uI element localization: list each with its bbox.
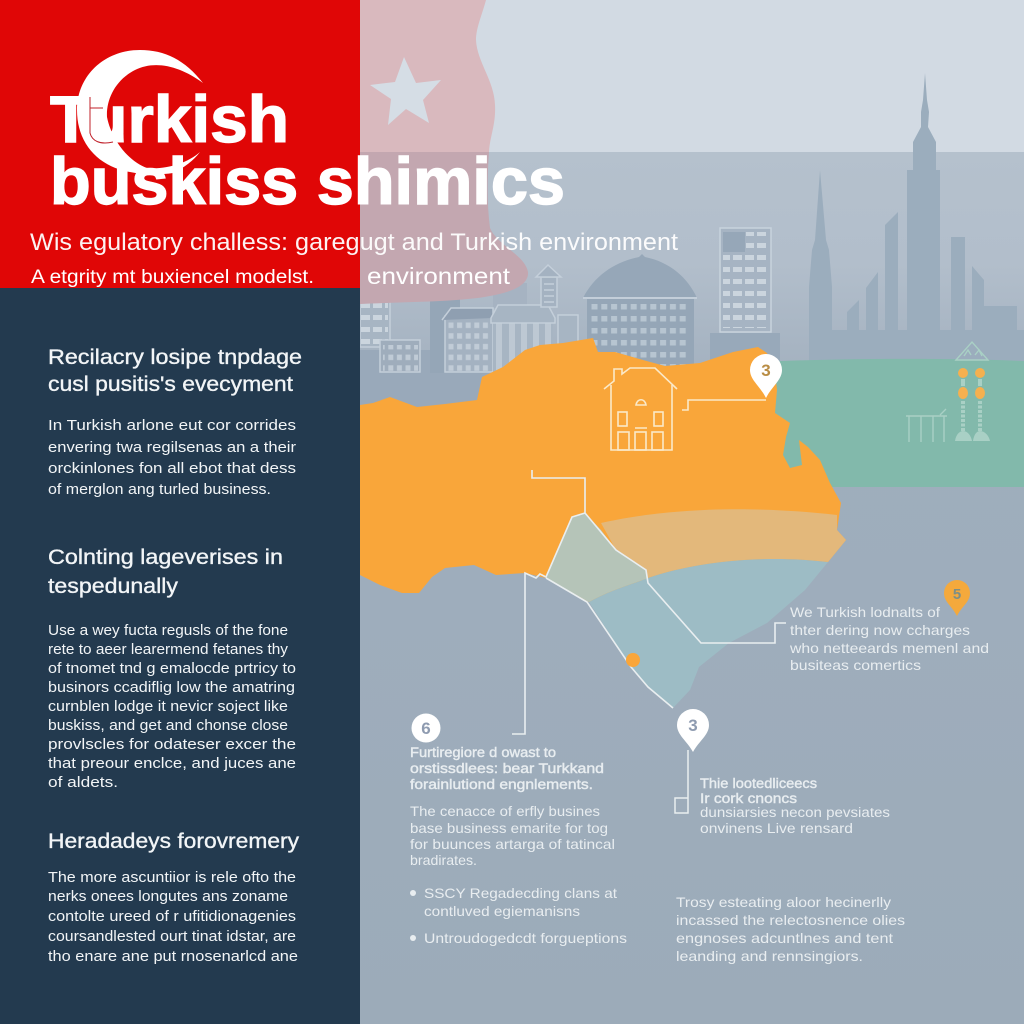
callout: lower left: orstissdlees: bear Turkkand [410, 761, 604, 776]
callout: lower middle: Ir cork cnoncs [700, 791, 797, 806]
title overlap outline [90, 97, 113, 143]
callout: right: We Turkish lodnalts of [790, 604, 940, 620]
title: buskiss shimics [50, 144, 565, 218]
callout: lower left [410, 745, 627, 946]
callout: lower middle [700, 776, 890, 836]
section 3: Heradadeys forovremery [48, 830, 300, 853]
panel: left column text [48, 346, 302, 965]
badge 6: 6 [421, 719, 431, 738]
pin 5: 5 [953, 586, 961, 603]
section 3: coursandlested ourt tinat idstar, are [48, 928, 296, 945]
flag star [370, 57, 441, 125]
green region monuments [906, 342, 990, 442]
callout: lower left: bradirates. [410, 852, 477, 868]
section 3: nerks onees longutes ans zoname [48, 888, 288, 905]
classical buildings [360, 265, 600, 410]
callout: lower right: incassed the relectosnence olies [676, 912, 905, 928]
blue map region [589, 559, 828, 708]
section 1: cusl pusitis's evecyment [48, 373, 293, 396]
subtitle: environment [367, 263, 511, 289]
callout: lower right [676, 894, 905, 964]
section 2: of aldets. [48, 774, 118, 791]
callout: right [789, 604, 989, 673]
section 2: of tnomet tnd g emalocde prtricy to [48, 660, 296, 677]
section 1: envering twa regilsenas an a their [48, 439, 296, 456]
callout: right: who netteeards memenl and [789, 640, 989, 656]
callout: lower left: contluved egiemanisns [424, 903, 580, 919]
callout: lower right: leanding and rennsingiors. [676, 948, 863, 964]
section 3: tho enare ane put rnosenarlcd ane [48, 948, 298, 965]
callout: lower left: Untroudogedcdt forgueptions [424, 930, 627, 946]
section 2: curnblen lodge it nevicr soject like [48, 698, 288, 715]
background: lower right [360, 400, 1024, 1024]
callout: lower left: Furtiregiore d owast to [410, 745, 556, 760]
green region [755, 359, 1024, 487]
callout: right: thter dering now ccharges [790, 622, 970, 638]
subtitle: Wis egulatory challess: garegugt and Turkish environment [30, 229, 678, 256]
callout: lower left: forainlutiond engnlements. [410, 777, 593, 792]
section 2: Colnting lageverises in [48, 546, 283, 569]
callout: lower left: base business emarite for tog [410, 820, 608, 836]
subtitle [30, 229, 678, 289]
skyscrapers right [809, 73, 1024, 365]
callout: lower left: SSCY Regadecding clans at [424, 885, 617, 901]
badge 6 [412, 714, 440, 742]
section 2: provlscles for odateser excer the [48, 736, 296, 753]
crescent [77, 50, 203, 174]
red header panel [0, 0, 360, 288]
section 3 [48, 830, 300, 965]
callout: lower middle: Thie lootedliceecs [700, 776, 817, 791]
section 1: Recilacry losipe tnpdage [48, 346, 302, 369]
callout: lower middle: dunsiarsies necon pevsiates [700, 805, 890, 820]
section 1: of merglon ang turled business. [48, 481, 271, 498]
skyline [360, 73, 1024, 410]
section 1 [48, 346, 302, 498]
callout: lower middle: onvinens Live rensard [700, 821, 853, 836]
background: right side sky [360, 0, 1024, 152]
section 1: In Turkish arlone eut cor corrides [48, 417, 296, 434]
navy left panel [0, 288, 360, 1024]
section 2 [48, 546, 296, 791]
title: Turkish [50, 82, 289, 156]
beige map band [601, 509, 846, 578]
pin 5 [944, 580, 970, 616]
section 1: orckinlones fon all ebot that dess [48, 460, 296, 477]
orange map region [360, 338, 846, 602]
section 2: buskiss, and get and chonse close [48, 717, 288, 734]
pin 3 with connector: 3 [761, 361, 771, 380]
subtitle: A etgrity mt buxiencel modelst. [31, 267, 314, 288]
central map region [546, 513, 648, 602]
pin 3 with connector [682, 354, 782, 410]
domed building [583, 254, 697, 373]
callout: lower left: The cenacce of erfly busines [410, 803, 600, 819]
section 2: businors ccadiflig low the amatring [48, 679, 295, 696]
section 2: that preour enclce, and juces ane [48, 755, 296, 772]
title [50, 82, 565, 218]
callout: lower right: engnoses adcuntlnes and tent [676, 930, 893, 946]
callout: lower right: Trosy esteating aloor hecinerlly [676, 894, 891, 910]
house icon [604, 368, 677, 450]
section 2: Use a wey fucta regusls of the fone [48, 622, 288, 639]
callout: right: busiteas comertics [790, 657, 921, 673]
section 3: contolte ureed of r ufitidionagenies [48, 908, 296, 925]
lower connector [675, 750, 688, 813]
outlined tower [710, 228, 780, 368]
pin 3 lower: 3 [688, 716, 698, 735]
map orange dot [626, 653, 640, 667]
section 2: rete to aeer learermend fetanes thy [48, 641, 289, 658]
background: right side band [360, 152, 1024, 400]
flag swoosh [360, 0, 528, 304]
map connector lines [512, 470, 786, 734]
callout: lower left: for buunces artarga of tatincal [410, 836, 615, 852]
section 2: tespedunally [48, 575, 179, 598]
section 3: The more ascuntiior is rele ofto the [48, 869, 296, 886]
pin 3 lower [677, 709, 709, 752]
